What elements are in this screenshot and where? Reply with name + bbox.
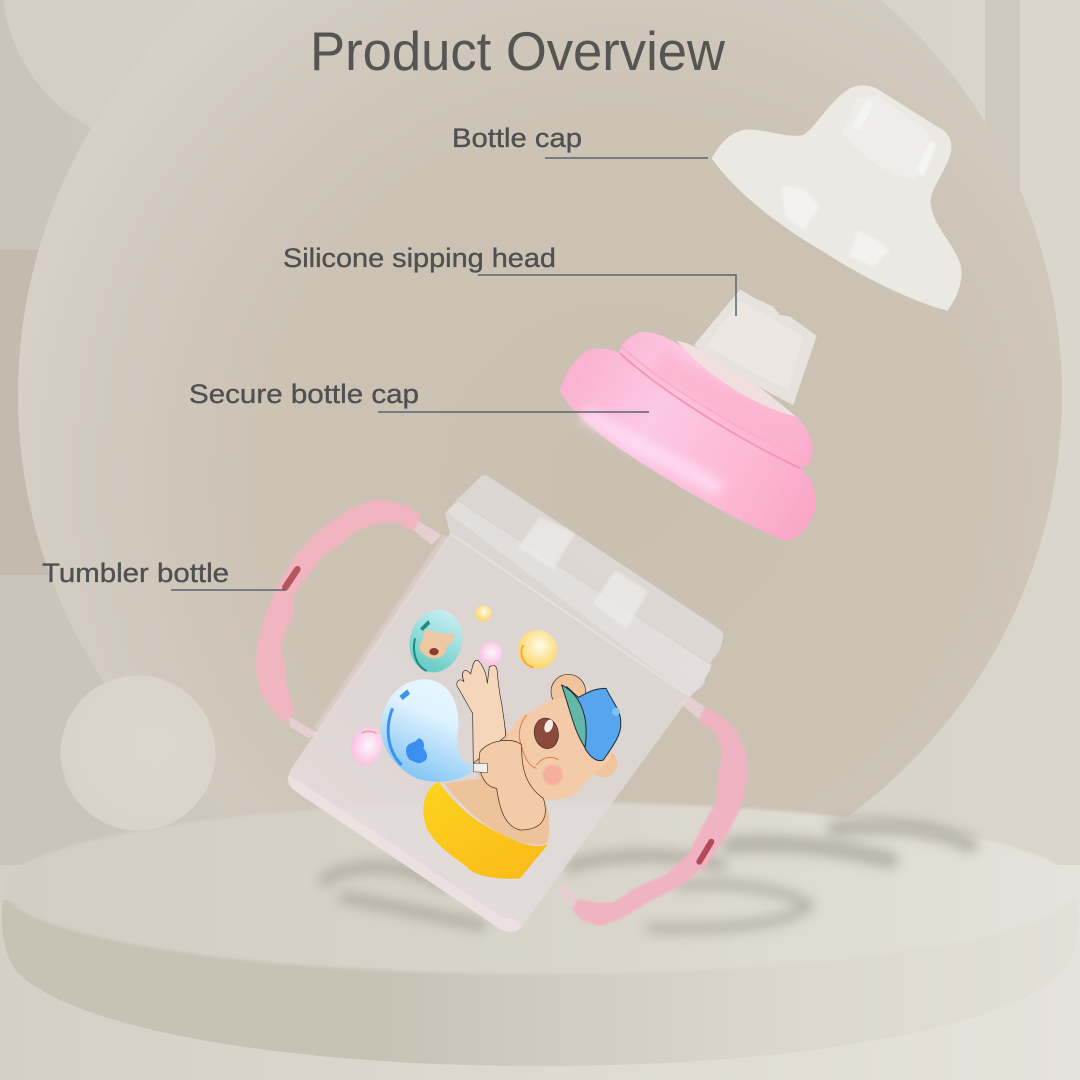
small bubbles (475, 605, 491, 621)
pants (423, 782, 548, 879)
lid body (559, 332, 816, 542)
nose (532, 716, 561, 751)
label: tumbler bottle: Tumbler bottle (42, 558, 229, 588)
label: silicone sipping head: Silicone sipping head (283, 243, 556, 273)
balloon (381, 679, 473, 782)
cap (567, 687, 621, 761)
label: secure bottle cap: Secure bottle cap (189, 379, 419, 409)
title: Product Overview (310, 20, 725, 82)
right handle (555, 697, 747, 925)
tumbler cup with handles (257, 475, 747, 932)
pink bubble (347, 724, 387, 769)
floor and platform (0, 802, 1080, 1080)
head (507, 698, 612, 800)
raised arm and hand (457, 660, 505, 763)
muzzle line (519, 715, 558, 768)
body (444, 730, 549, 845)
teal bubble (403, 604, 469, 678)
label: bottle cap: Bottle cap (452, 123, 582, 153)
cheek (543, 765, 563, 785)
clear bottle cap (712, 85, 962, 311)
label: silicone sipping head (283, 243, 736, 316)
sphere (60, 676, 216, 830)
ears (551, 674, 617, 777)
cup body (288, 475, 723, 932)
pink lid with silicone spout (559, 289, 817, 542)
straw (473, 763, 487, 773)
silicone spout (677, 289, 817, 417)
bear decal (347, 604, 621, 879)
cup shadow (325, 827, 970, 928)
left handle (257, 501, 442, 738)
pink ball above hand (479, 642, 503, 666)
front arm (479, 740, 545, 830)
